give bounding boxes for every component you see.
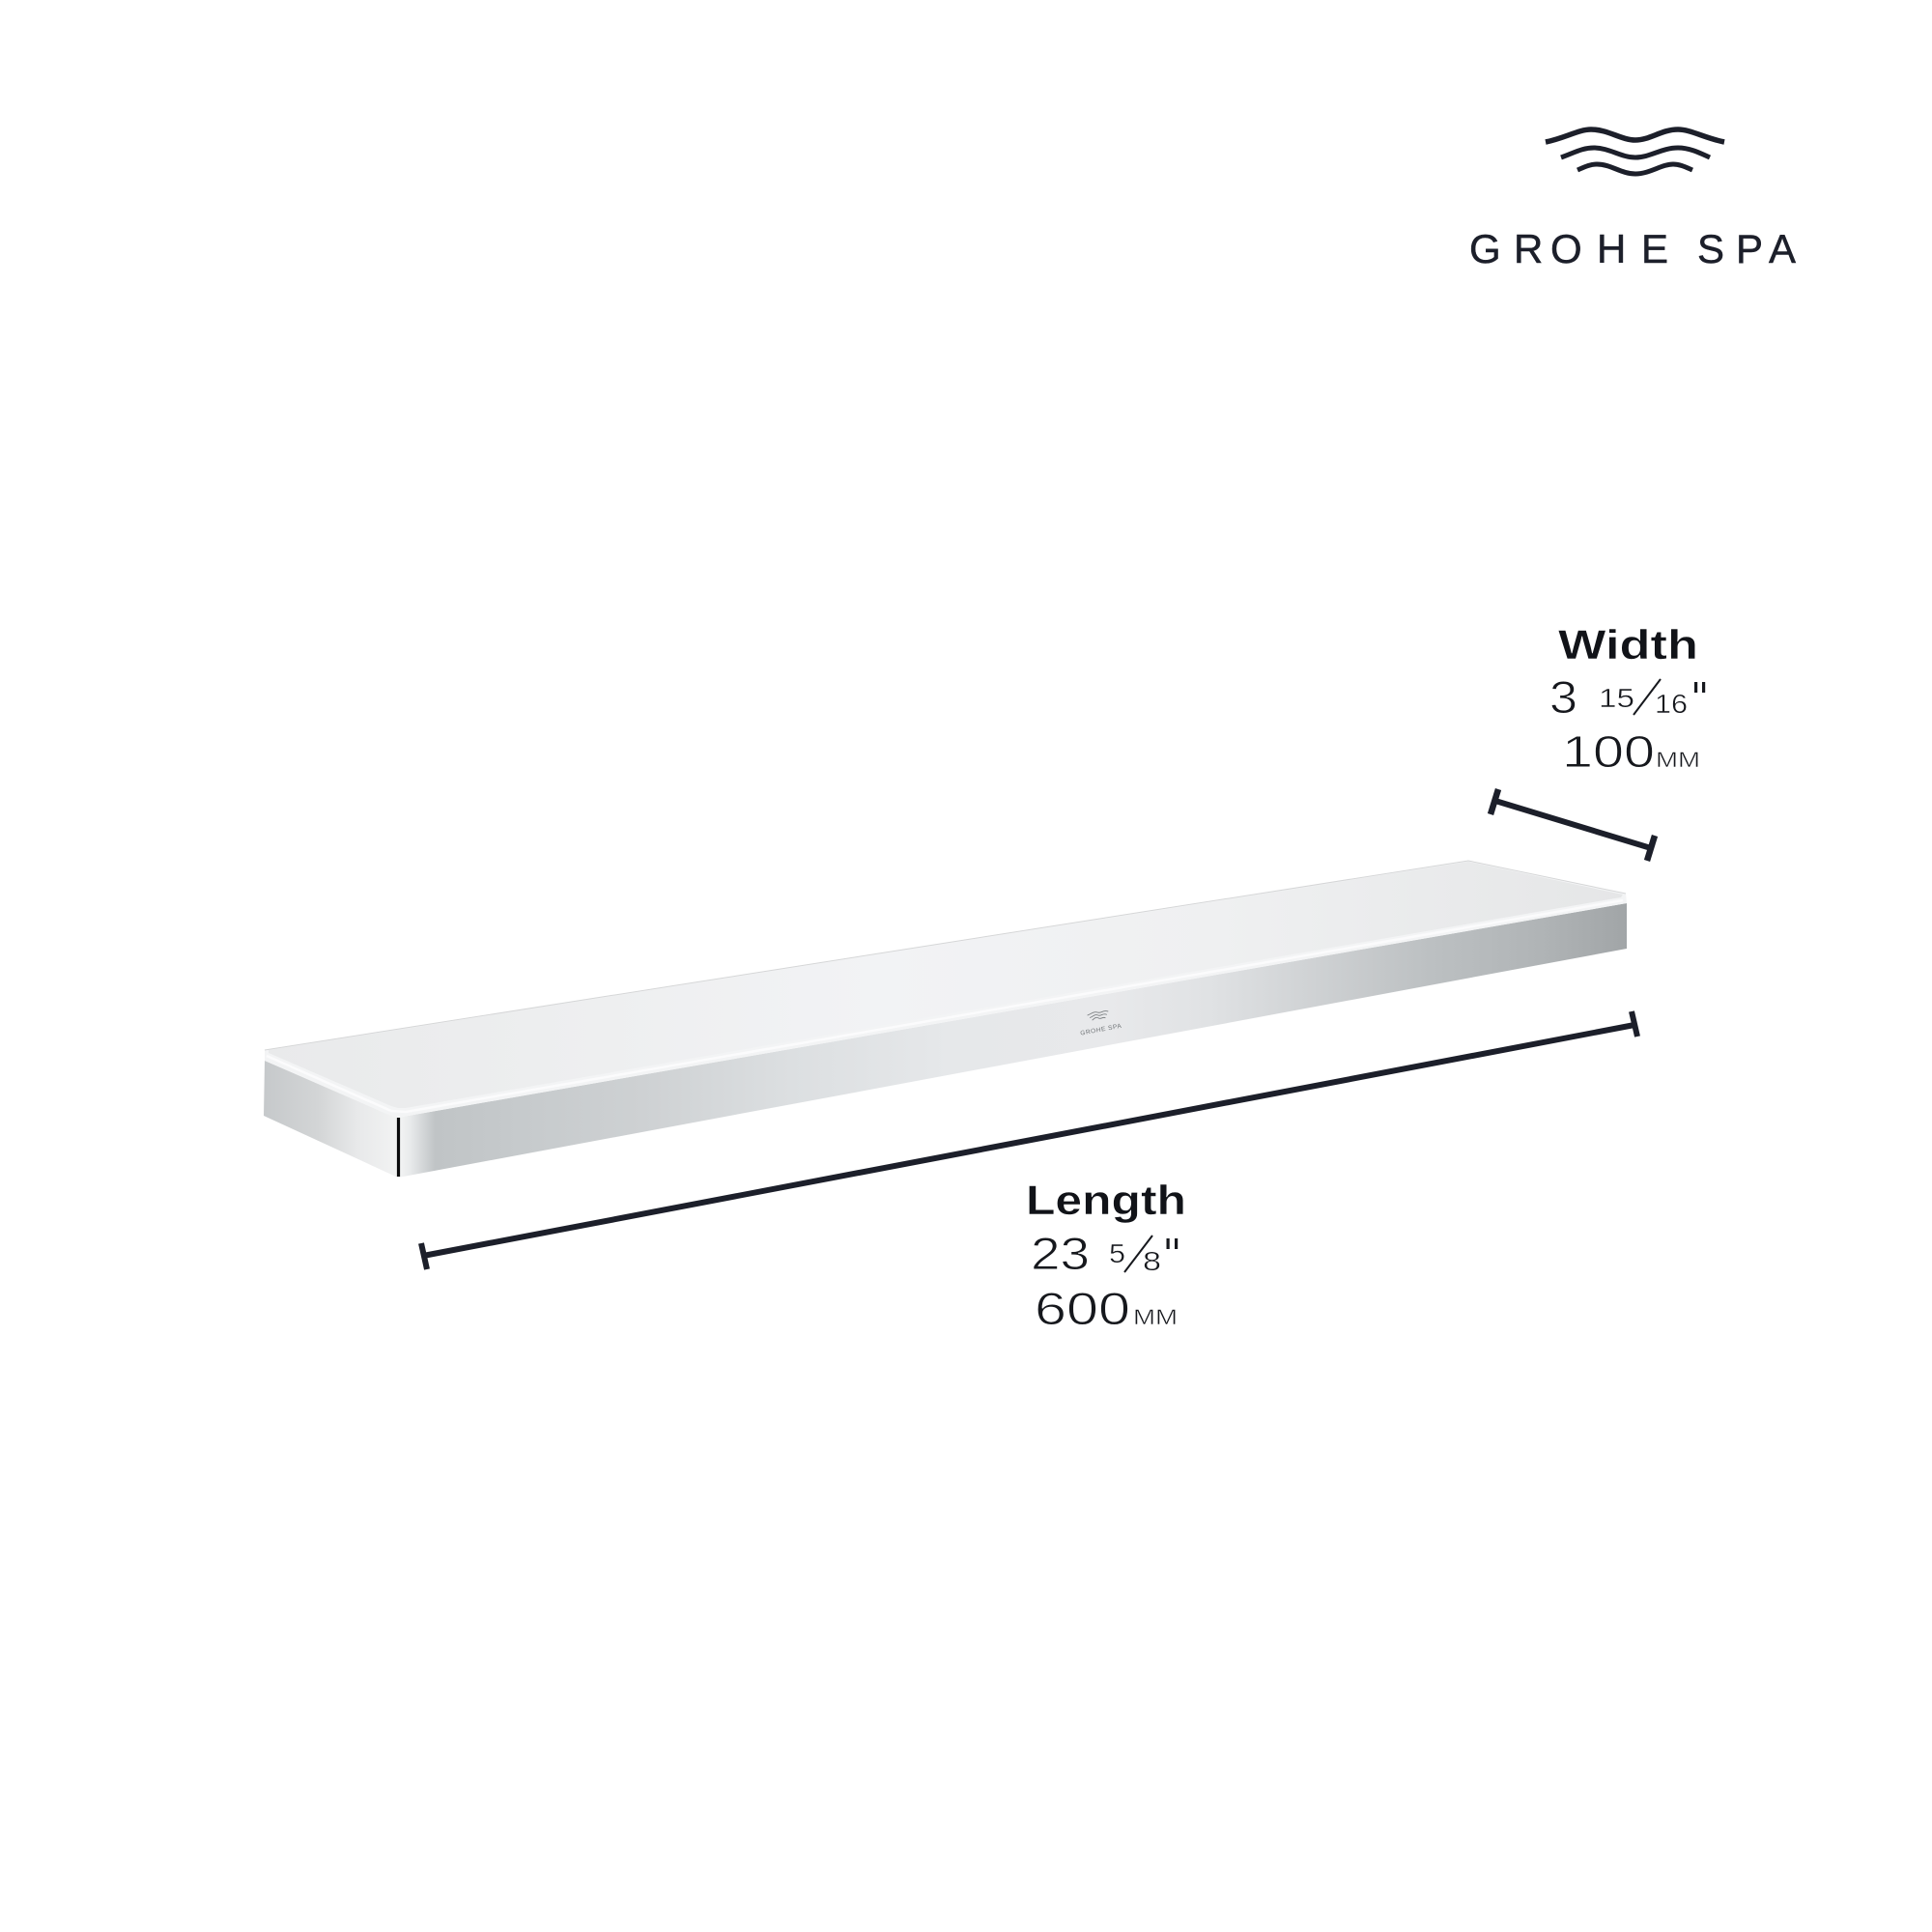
heading: Length: Length [1026,1178,1186,1224]
logo wordmark: GROHE SPA [1469,226,1796,271]
length label [1026,1178,1186,1334]
shelf product image [264,861,1627,1178]
shelf glass top [269,862,1623,1108]
small logo on shelf [1077,1008,1122,1037]
shelf back edge highlight [265,861,1626,1050]
logo: GROHE SPA [1469,129,1796,271]
length in millimetres [1035,1283,1178,1334]
shelf rim highlight [267,900,1623,1112]
heading: Width: Width [1558,622,1698,668]
width in inches [1549,671,1705,723]
width in millimetres: 100 [1562,726,1655,777]
width label [1549,622,1705,777]
icon: waves [1546,129,1724,174]
length in inches: 8 [1143,1246,1161,1276]
length in inches: 23 [1031,1228,1090,1279]
shelf side face [264,1061,398,1178]
length in inches [1031,1228,1178,1279]
width in millimetres: MM [1656,748,1700,772]
shelf front face [397,903,1627,1178]
length dimension bar [421,1011,1637,1269]
shelf glass rim [265,861,1627,1118]
small logo on shelf: GROHE SPA [1080,1023,1122,1037]
length in millimetres: MM [1133,1305,1178,1329]
length in millimetres: 600 [1035,1283,1130,1334]
width in inches: 16 [1655,689,1688,719]
width in inches: 3 [1549,671,1577,723]
length in inches: 5 [1109,1238,1125,1268]
width in inches: 15 [1599,683,1634,713]
shelf corner seam [397,1118,400,1177]
width in millimetres [1562,726,1700,777]
width dimension bar [1491,789,1655,861]
